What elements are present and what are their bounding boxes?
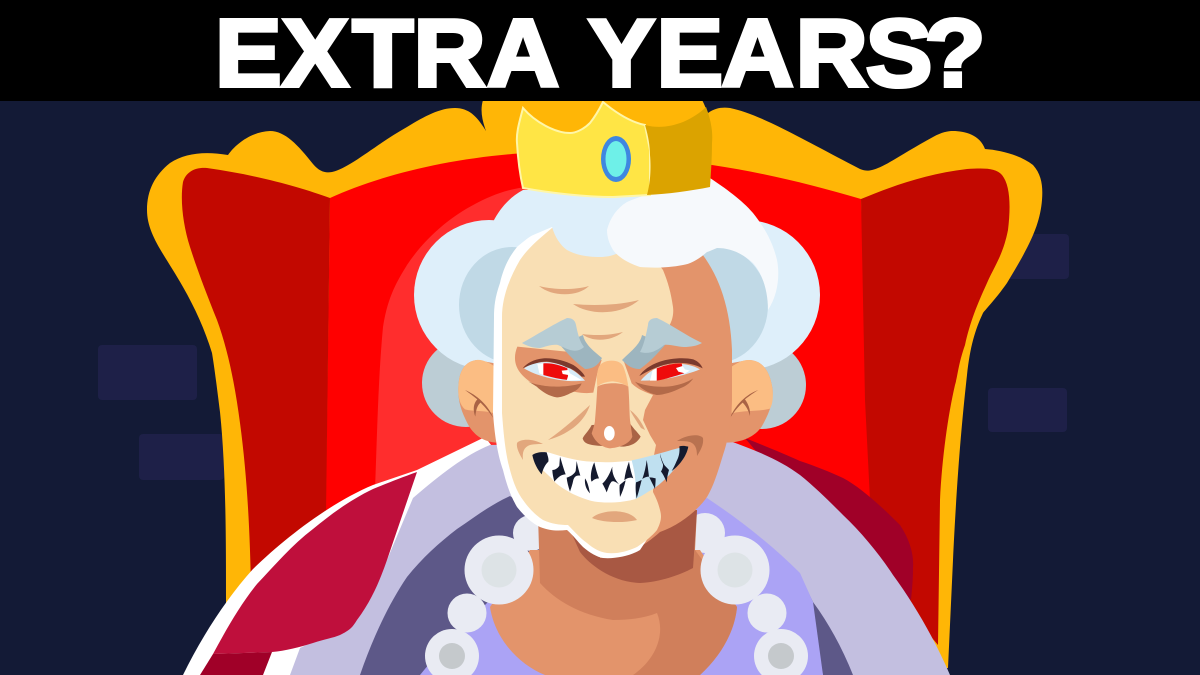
left smile line [517,440,543,460]
left socket [515,347,602,393]
shaded right teeth [632,447,688,499]
crown shaded side [645,107,712,195]
right socket [623,350,707,395]
face wrinkles [517,405,703,460]
throne right dark panel [861,169,1010,645]
left mouth corner [532,452,549,474]
left cheek line [548,405,590,440]
left glint [562,370,582,381]
left eyelid [523,358,585,377]
left eye [523,358,585,381]
title bar [0,0,1200,107]
teeth gaps [552,457,566,482]
left puff shade [459,247,565,363]
neck shadow [570,510,697,583]
nostrils [583,423,641,447]
lavender dress [420,498,823,675]
crown [517,102,712,197]
white hair cloud [607,178,778,310]
title text: EXTRA YEARS? [215,0,985,107]
background bricks [98,234,1069,480]
medium pearls [448,594,486,632]
right eyelid [639,358,703,376]
white fur trim [183,437,510,675]
large left pearl [464,536,534,604]
right sclera [641,364,700,381]
left sclera [524,362,585,381]
nose highlight [604,426,615,441]
queen [414,102,820,675]
nose mid [592,383,632,448]
right iris [657,363,684,381]
eye sockets [515,347,707,397]
eyebrows [522,318,702,369]
throne [147,100,1042,675]
right pale streak [650,368,657,381]
nose bridge [597,361,628,387]
ears [458,360,773,443]
dark lilac inner right [800,575,853,675]
right brow [640,318,702,353]
bottom left pearl [425,629,479,675]
lilac collar [290,440,950,675]
forehead wrinkles [539,286,639,340]
left puff [414,220,564,370]
crimson lapel [213,472,417,654]
left brow [522,318,584,351]
lower lip [592,511,637,522]
large right pearl [700,536,770,604]
highlight behind head [375,187,560,490]
white mask outline [493,225,650,558]
left iris [542,363,568,380]
royal cape [183,437,950,675]
right smile line [677,435,703,456]
side hair puffs [414,220,820,370]
crown front [517,102,650,197]
pearl necklace [425,536,808,675]
right glint [676,366,690,373]
chest and neck [490,510,737,675]
white teeth [532,452,640,503]
left under-eye [525,379,582,397]
throne gold frame [147,100,1042,675]
right under-eye [635,378,693,395]
face base [600,240,732,558]
small pearls behind neck [513,513,725,553]
light hair cap [493,190,650,257]
bottom right pearl [754,629,808,675]
nose [583,361,641,448]
throne left dark panel [182,168,330,590]
black banner [0,0,1200,101]
crown gem [601,136,631,182]
hair top [493,178,778,310]
right puff shade [664,247,768,363]
throne centre red panel [325,153,875,560]
chest shade [538,510,737,675]
dark crimson cape right [745,438,913,600]
right cheek line [630,410,645,430]
grinning mouth [532,446,688,503]
chest skin [490,550,737,675]
dark crimson lapel fold [200,652,272,675]
right mouth corner [672,446,688,471]
back hair curls [422,339,806,429]
light mask skin [502,228,673,553]
left brow shade [560,335,602,369]
right brow shade [622,335,665,369]
left pale streak [537,363,543,375]
right eye [639,358,703,381]
left ear [458,360,496,443]
dark lilac inner left [360,496,600,675]
right puff [670,220,820,370]
right ear [727,360,773,443]
